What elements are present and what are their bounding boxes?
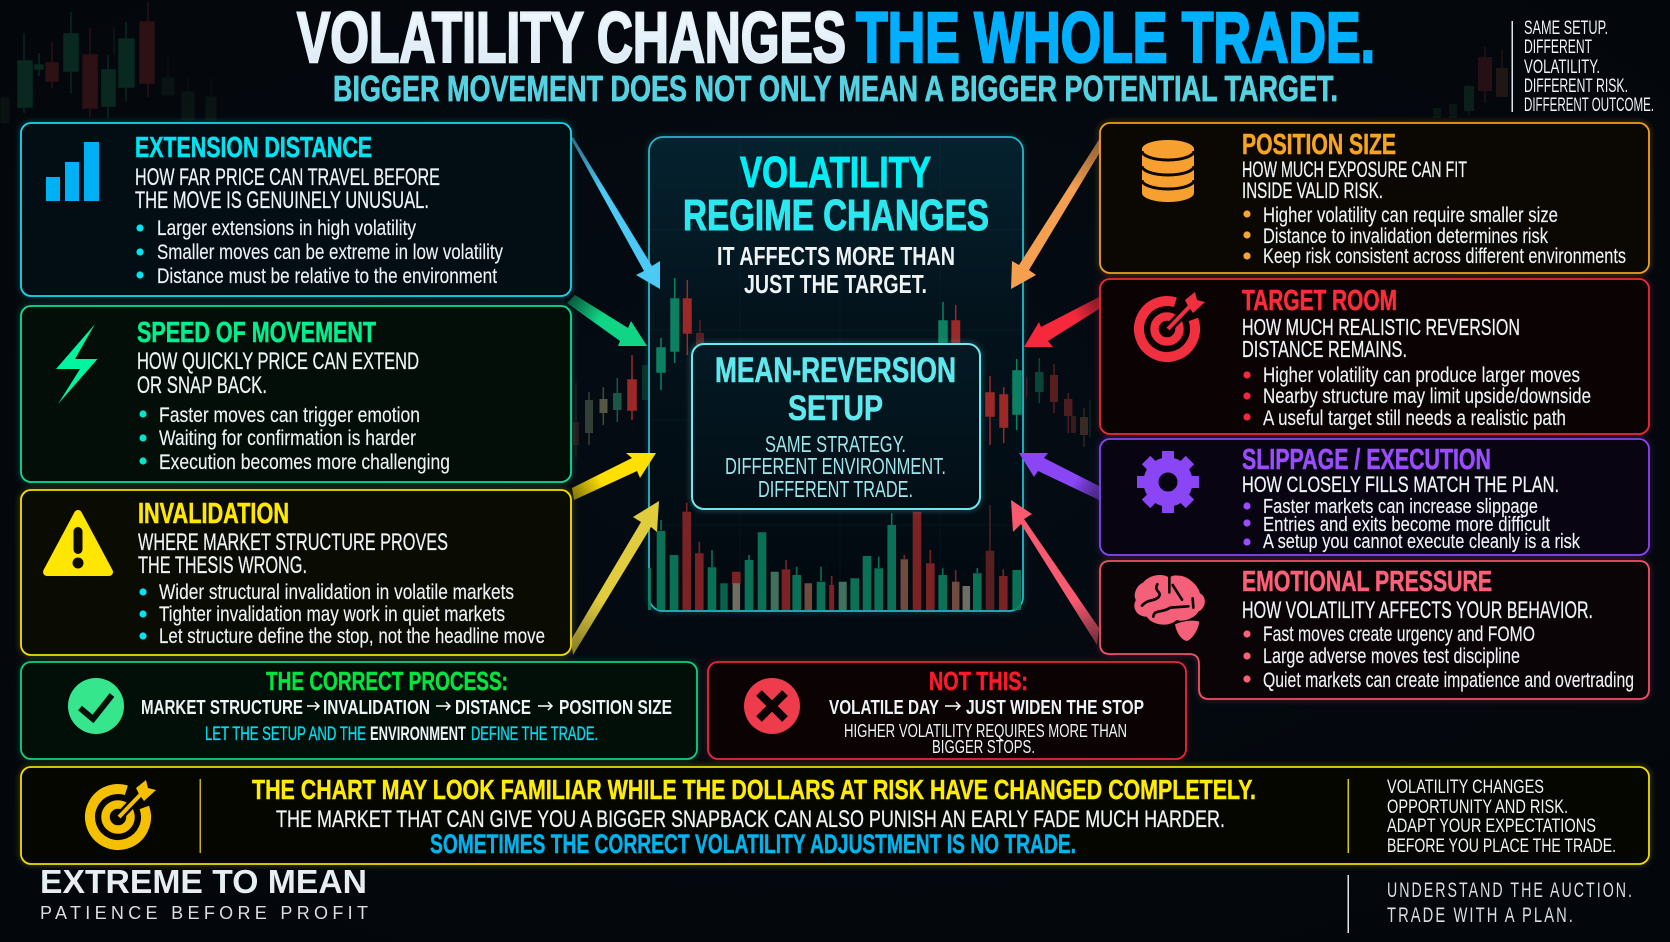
top right note: DIFFERENT bbox=[1524, 37, 1592, 58]
heading: slippage execution: SLIPPAGE / EXECUTION bbox=[1242, 444, 1491, 476]
footer slogan bbox=[1348, 875, 1634, 933]
central heading bbox=[683, 148, 989, 240]
subtitle: BIGGER MOVEMENT DOES NOT ONLY MEAN A BIGGER POTENTIAL TARGET. bbox=[333, 68, 1338, 109]
heading: speed of movement: SPEED OF MOVEMENT bbox=[137, 317, 376, 349]
side note: ADAPT YOUR EXPECTATIONS bbox=[1387, 815, 1596, 837]
panel: target room bbox=[1100, 279, 1649, 434]
panel: mean reversion setup: SAME STRATEGY. bbox=[765, 431, 906, 457]
bullet list bbox=[1243, 203, 1626, 268]
bullet list bbox=[139, 580, 545, 648]
process flow: MARKET STRUCTURE bbox=[141, 697, 303, 719]
heading: emotional pressure: EMOTIONAL PRESSURE bbox=[1242, 566, 1492, 598]
description bbox=[137, 348, 419, 399]
takeaway conclusion: SOMETIMES THE CORRECT VOLATILITY ADJUSTMENT IS NO TRADE. bbox=[430, 829, 1076, 859]
panel: position size bbox=[1100, 123, 1649, 273]
bullet list: Distance must be relative to the environment bbox=[157, 264, 497, 288]
bullet list bbox=[1243, 496, 1581, 553]
process note: ENVIRONMENT bbox=[370, 724, 466, 745]
wrong flow note: HIGHER VOLATILITY REQUIRES MORE THAN bbox=[844, 721, 1127, 741]
icon: bar chart bbox=[46, 142, 99, 201]
description: DISTANCE REMAINS. bbox=[1242, 336, 1407, 362]
heading: invalidation: INVALIDATION bbox=[138, 498, 289, 530]
icon: gold target bbox=[82, 780, 156, 853]
bullet list: Large adverse moves test discipline bbox=[1263, 644, 1520, 668]
icon: brain bbox=[1134, 575, 1205, 641]
panel: mean reversion setup: DIFFERENT ENVIRONMENT. bbox=[725, 453, 946, 479]
takeaway text: THE MARKET THAT CAN GIVE YOU A BIGGER SNAPBACK CAN ALSO PUNISH AN EARLY FADE MUCH HARDER. bbox=[276, 806, 1225, 833]
description: WHERE MARKET STRUCTURE PROVES bbox=[138, 529, 448, 556]
process flow: DISTANCE bbox=[455, 697, 531, 719]
bullet list: Distance to invalidation determines risk bbox=[1263, 224, 1548, 248]
takeaway headline: THE CHART MAY LOOK FAMILIAR WHILE THE DOLLARS AT RISK HAVE CHANGED COMPLETELY. bbox=[252, 774, 1256, 805]
panel: mean reversion setup bbox=[692, 344, 980, 509]
wrong flow: JUST WIDEN THE STOP bbox=[966, 697, 1144, 719]
panel: slippage and execution bbox=[1100, 439, 1649, 555]
heading: extension distance: EXTENSION DISTANCE bbox=[135, 132, 372, 164]
background candlesticks top right bbox=[1433, 47, 1508, 118]
central heading: REGIME CHANGES bbox=[683, 191, 989, 240]
icon: check mark bbox=[68, 678, 124, 734]
panel: emotional pressure bbox=[1100, 561, 1649, 699]
background candlesticks top left bbox=[1, 2, 216, 123]
wrong flow note: BIGGER STOPS. bbox=[932, 737, 1035, 757]
arrow: extension distance to center bbox=[571, 137, 660, 289]
panel: mean reversion setup: MEAN-REVERSION bbox=[715, 351, 956, 390]
bullet list: Smaller moves can be extreme in low volatility bbox=[157, 240, 503, 264]
icon: warning triangle bbox=[47, 514, 109, 572]
description: HOW MUCH EXPOSURE CAN FIT bbox=[1242, 157, 1467, 182]
panel: invalidation bbox=[21, 490, 571, 655]
arrow: speed of movement to center bbox=[567, 295, 647, 346]
arrow: slippage to center bbox=[1019, 453, 1099, 500]
bullet list bbox=[139, 403, 450, 474]
arrow: emotional pressure to center bbox=[1011, 500, 1099, 645]
side note: OPPORTUNITY AND RISK. bbox=[1387, 796, 1568, 818]
side note: VOLATILITY CHANGES bbox=[1387, 776, 1544, 798]
bullet list bbox=[136, 216, 503, 288]
icon: stacked coins database bbox=[1142, 140, 1194, 202]
central heading: VOLATILITY bbox=[740, 148, 931, 197]
heading: the correct process: THE CORRECT PROCESS: bbox=[266, 666, 508, 696]
arrow: position size to center bbox=[1011, 138, 1100, 289]
bullet list: Nearby structure may limit upside/downside bbox=[1263, 384, 1591, 408]
panel: bottom takeaway bbox=[21, 767, 1649, 864]
top right note bbox=[1512, 18, 1654, 116]
brand footer bbox=[40, 863, 368, 923]
process flow: INVALIDATION bbox=[323, 697, 430, 719]
process flow: POSITION SIZE bbox=[559, 697, 672, 719]
description: THE THESIS WRONG. bbox=[138, 552, 307, 579]
bullet list: Execution becomes more challenging bbox=[159, 450, 450, 474]
bullet list bbox=[1243, 363, 1591, 430]
bullet list: Tighter invalidation may work in quiet markets bbox=[159, 602, 505, 626]
panel: mean reversion setup: DIFFERENT TRADE. bbox=[758, 476, 913, 502]
brand footer: EXTREME TO MEAN bbox=[40, 863, 367, 900]
arrow: invalidation to center lower bbox=[571, 501, 659, 655]
bullet list: Fast moves create urgency and FOMO bbox=[1263, 622, 1535, 646]
description bbox=[1242, 157, 1467, 203]
icon: lightning bolt bbox=[56, 324, 98, 404]
description: HOW CLOSELY FILLS MATCH THE PLAN. bbox=[1242, 472, 1559, 497]
bullet list: Higher volatility can require smaller size bbox=[1263, 203, 1558, 227]
panel: the correct process bbox=[21, 662, 697, 759]
arrow: invalidation to center upper bbox=[572, 453, 656, 500]
bullet list: A useful target still needs a realistic path bbox=[1263, 406, 1566, 430]
bullet list: Higher volatility can produce larger moves bbox=[1263, 363, 1580, 387]
panel: mean reversion setup: SETUP bbox=[788, 389, 883, 428]
top right note: VOLATILITY. bbox=[1524, 57, 1600, 78]
brand footer: PATIENCE BEFORE PROFIT bbox=[40, 903, 368, 923]
description bbox=[135, 164, 440, 214]
footer slogan: TRADE WITH A PLAN. bbox=[1387, 904, 1575, 927]
wrong flow: VOLATILE DAY bbox=[829, 697, 939, 719]
heading: target room: TARGET ROOM bbox=[1242, 285, 1397, 317]
description bbox=[1242, 314, 1520, 362]
bullet list bbox=[1243, 622, 1634, 692]
panel: central volatility regime bbox=[573, 137, 1090, 611]
process note bbox=[205, 724, 598, 745]
bullet list: Larger extensions in high volatility bbox=[157, 216, 416, 240]
heading: not this: NOT THIS: bbox=[929, 666, 1028, 696]
icon: x mark bbox=[744, 678, 800, 734]
description: THE MOVE IS GENUINELY UNUSUAL. bbox=[135, 187, 429, 214]
process note: LET THE SETUP AND THE bbox=[205, 724, 366, 745]
heading: position size: POSITION SIZE bbox=[1242, 129, 1396, 161]
wrong flow bbox=[829, 697, 1144, 719]
bullet list: Waiting for confirmation is harder bbox=[159, 426, 416, 450]
description: INSIDE VALID RISK. bbox=[1242, 178, 1383, 203]
bullet list: A setup you cannot execute cleanly is a risk bbox=[1263, 531, 1581, 553]
volume style candle bars bbox=[650, 503, 1017, 610]
description: HOW QUICKLY PRICE CAN EXTEND bbox=[137, 348, 419, 375]
wrong flow note bbox=[844, 721, 1127, 757]
bullet list: Entries and exits become more difficult bbox=[1263, 514, 1550, 536]
bullet list: Let structure define the stop, not the headline move bbox=[159, 624, 545, 648]
panel: speed of movement bbox=[21, 306, 571, 482]
icon: gear bbox=[1137, 451, 1199, 513]
top right note: SAME SETUP. bbox=[1524, 18, 1608, 39]
arrow: target room to center bbox=[1024, 297, 1099, 347]
description: OR SNAP BACK. bbox=[137, 372, 267, 399]
panel: extension distance bbox=[21, 123, 571, 296]
title: VOLATILITY CHANGES bbox=[297, 0, 846, 78]
panel: not this bbox=[708, 662, 1186, 759]
central subheading: IT AFFECTS MORE THAN bbox=[717, 241, 955, 271]
description: HOW MUCH REALISTIC REVERSION bbox=[1242, 314, 1520, 340]
icon: red target bbox=[1131, 292, 1205, 365]
bullet list: Wider structural invalidation in volatile markets bbox=[159, 580, 514, 604]
bullet list: Faster moves can trigger emotion bbox=[159, 403, 420, 427]
description bbox=[138, 529, 448, 579]
central subheading: JUST THE TARGET. bbox=[744, 269, 927, 299]
bullet list: Faster markets can increase slippage bbox=[1263, 496, 1538, 518]
process flow bbox=[141, 697, 672, 719]
candlesticks beside the center panels bbox=[573, 278, 1090, 457]
process note: DEFINE THE TRADE. bbox=[471, 724, 598, 745]
central subheading bbox=[717, 241, 955, 299]
title: THE WHOLE TRADE. bbox=[856, 0, 1375, 78]
description: HOW FAR PRICE CAN TRAVEL BEFORE bbox=[135, 164, 440, 191]
side note bbox=[1387, 776, 1616, 857]
